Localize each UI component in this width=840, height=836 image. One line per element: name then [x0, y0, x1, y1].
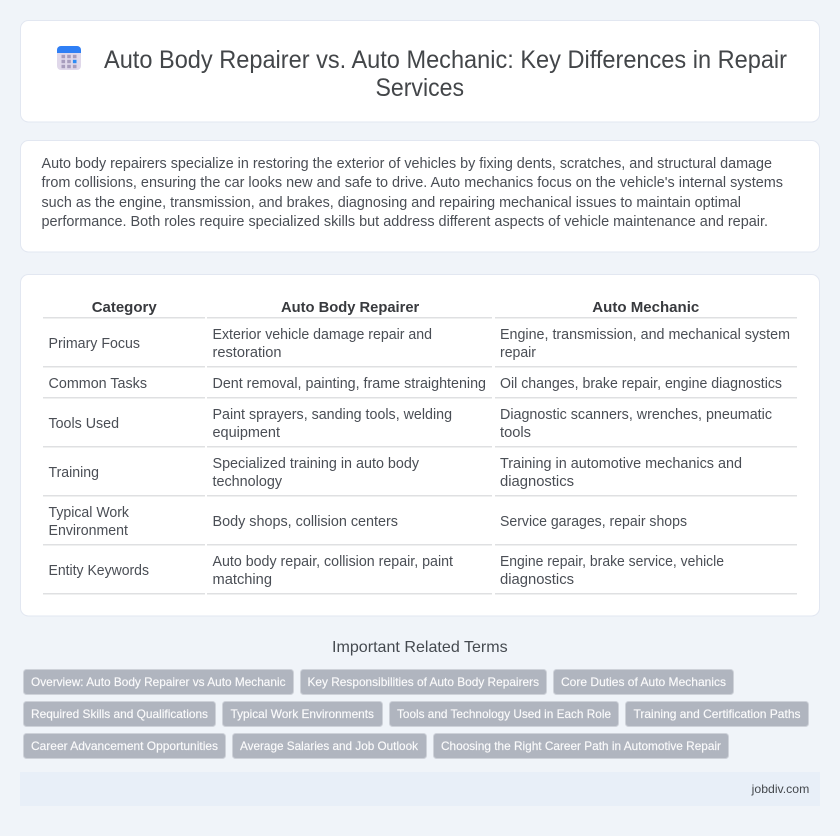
title: Services	[376, 74, 464, 102]
table row: common tasks: Dent removal, painting, frame straightening	[212, 376, 486, 392]
text block: introduction: Auto body repairers specialize in restoring the exterior of vehicles by fixing dents, scratches, and structural damage	[42, 156, 772, 172]
table row: common tasks: Common Tasks	[48, 376, 147, 392]
tag: Choosing the Right Career Path in Automotive Repair	[441, 739, 721, 753]
tag: Typical Work Environments	[230, 707, 374, 721]
tag: Training and Certification Paths	[634, 707, 800, 721]
table row: entity keywords: diagnostics	[500, 572, 574, 588]
table row: primary focus: restoration	[212, 345, 282, 361]
panel: header	[20, 20, 820, 122]
table row: primary focus: Exterior vehicle damage repair and	[212, 327, 432, 343]
text block: introduction: performance. Both roles require specialized skills but address different aspects of vehicle maintenance and repair.	[42, 214, 768, 230]
panel: comparison table	[20, 274, 820, 616]
table row: training	[43, 456, 797, 496]
tag: Key Responsibilities of Auto Body Repairers	[308, 675, 539, 689]
table row: training: technology	[212, 474, 283, 490]
table row: training: Training	[48, 465, 99, 481]
table row: primary focus	[43, 327, 797, 368]
tag: Career Advancement Opportunities	[31, 739, 218, 753]
table row: tools used: Paint sprayers, sanding tools, welding	[212, 407, 452, 423]
tag: Core Duties of Auto Mechanics	[561, 675, 726, 689]
tag	[24, 702, 216, 726]
table row: training: Specialized training in auto body	[212, 456, 420, 472]
tag	[24, 670, 294, 694]
table row: tools used: tools	[500, 425, 531, 441]
table row: tools used: equipment	[212, 425, 280, 441]
table row: typical work environment: Body shops, collision centers	[212, 514, 398, 530]
table row: primary focus: repair	[500, 345, 536, 361]
table row: entity keywords: Engine repair, brake service, vehicle	[500, 554, 724, 570]
table row: typical work environment: Environment	[48, 523, 128, 539]
table header row	[43, 299, 797, 318]
table row: primary focus: Engine, transmission, and mechanical system	[500, 327, 790, 343]
tag	[626, 702, 808, 726]
panel: introduction	[20, 140, 820, 252]
table row: entity keywords: Auto body repair, collision repair, paint	[212, 554, 453, 570]
table row: tools used: Tools Used	[48, 416, 119, 432]
title	[104, 46, 787, 102]
table row: tools used	[43, 407, 797, 448]
heading: important related terms: Important Related Terms	[332, 639, 508, 656]
footer	[20, 772, 820, 806]
table row: typical work environment	[43, 505, 797, 546]
text block: introduction	[42, 156, 783, 230]
table row: typical work environment: Typical Work	[48, 505, 130, 521]
table row: common tasks	[43, 376, 797, 398]
table row: entity keywords: Entity Keywords	[48, 563, 149, 579]
icon: calendar	[57, 46, 81, 70]
table row: common tasks: Oil changes, brake repair, engine diagnostics	[500, 376, 782, 392]
tag: Average Salaries and Job Outlook	[240, 739, 419, 753]
table header row: Category	[92, 299, 157, 316]
table row: training: diagnostics	[500, 474, 574, 490]
table row: training: Training in automotive mechanics and	[500, 456, 742, 472]
tag: Overview: Auto Body Repairer vs Auto Mechanic	[31, 675, 286, 689]
tag	[554, 670, 734, 694]
text block: introduction: from collisions, ensuring the car looks new and safe to drive. Auto mechanics focus on the vehicle's internal systems	[42, 175, 783, 191]
footer: jobdiv.com	[751, 782, 809, 796]
tag: Required Skills and Qualifications	[31, 707, 208, 721]
table header row: Auto Mechanic	[592, 299, 699, 316]
table row: entity keywords: matching	[212, 572, 272, 588]
table row: entity keywords	[43, 554, 797, 594]
title: Auto Body Repairer vs. Auto Mechanic: Key Differences in Repair	[104, 46, 787, 74]
tag	[24, 734, 226, 758]
tag	[300, 670, 546, 694]
table row: typical work environment: Service garages, repair shops	[500, 514, 687, 530]
table row: tools used: Diagnostic scanners, wrenches, pneumatic	[500, 407, 772, 423]
related term tags	[24, 670, 808, 758]
tag	[434, 734, 728, 758]
tag	[390, 702, 618, 726]
text block: introduction: such as the engine, transmission, and brakes, diagnosing and repairing mechanical issues to maintain optimal	[42, 195, 741, 211]
tag	[222, 702, 382, 726]
table row: primary focus: Primary Focus	[48, 336, 140, 352]
tag	[232, 734, 426, 758]
tag: Tools and Technology Used in Each Role	[397, 707, 611, 721]
table header row: Auto Body Repairer	[281, 299, 419, 316]
